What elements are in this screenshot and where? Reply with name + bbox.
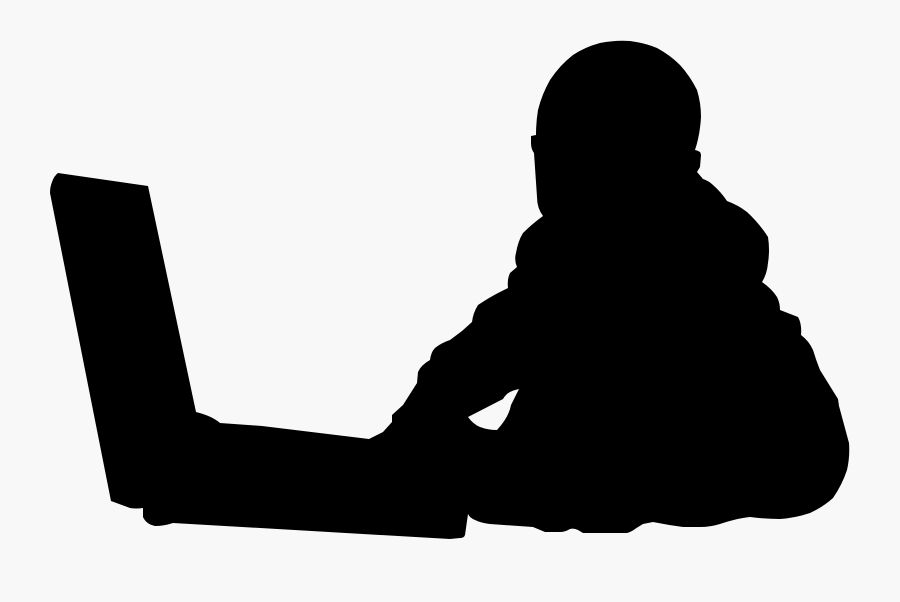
silhouette: child with laptop <box>50 41 849 539</box>
